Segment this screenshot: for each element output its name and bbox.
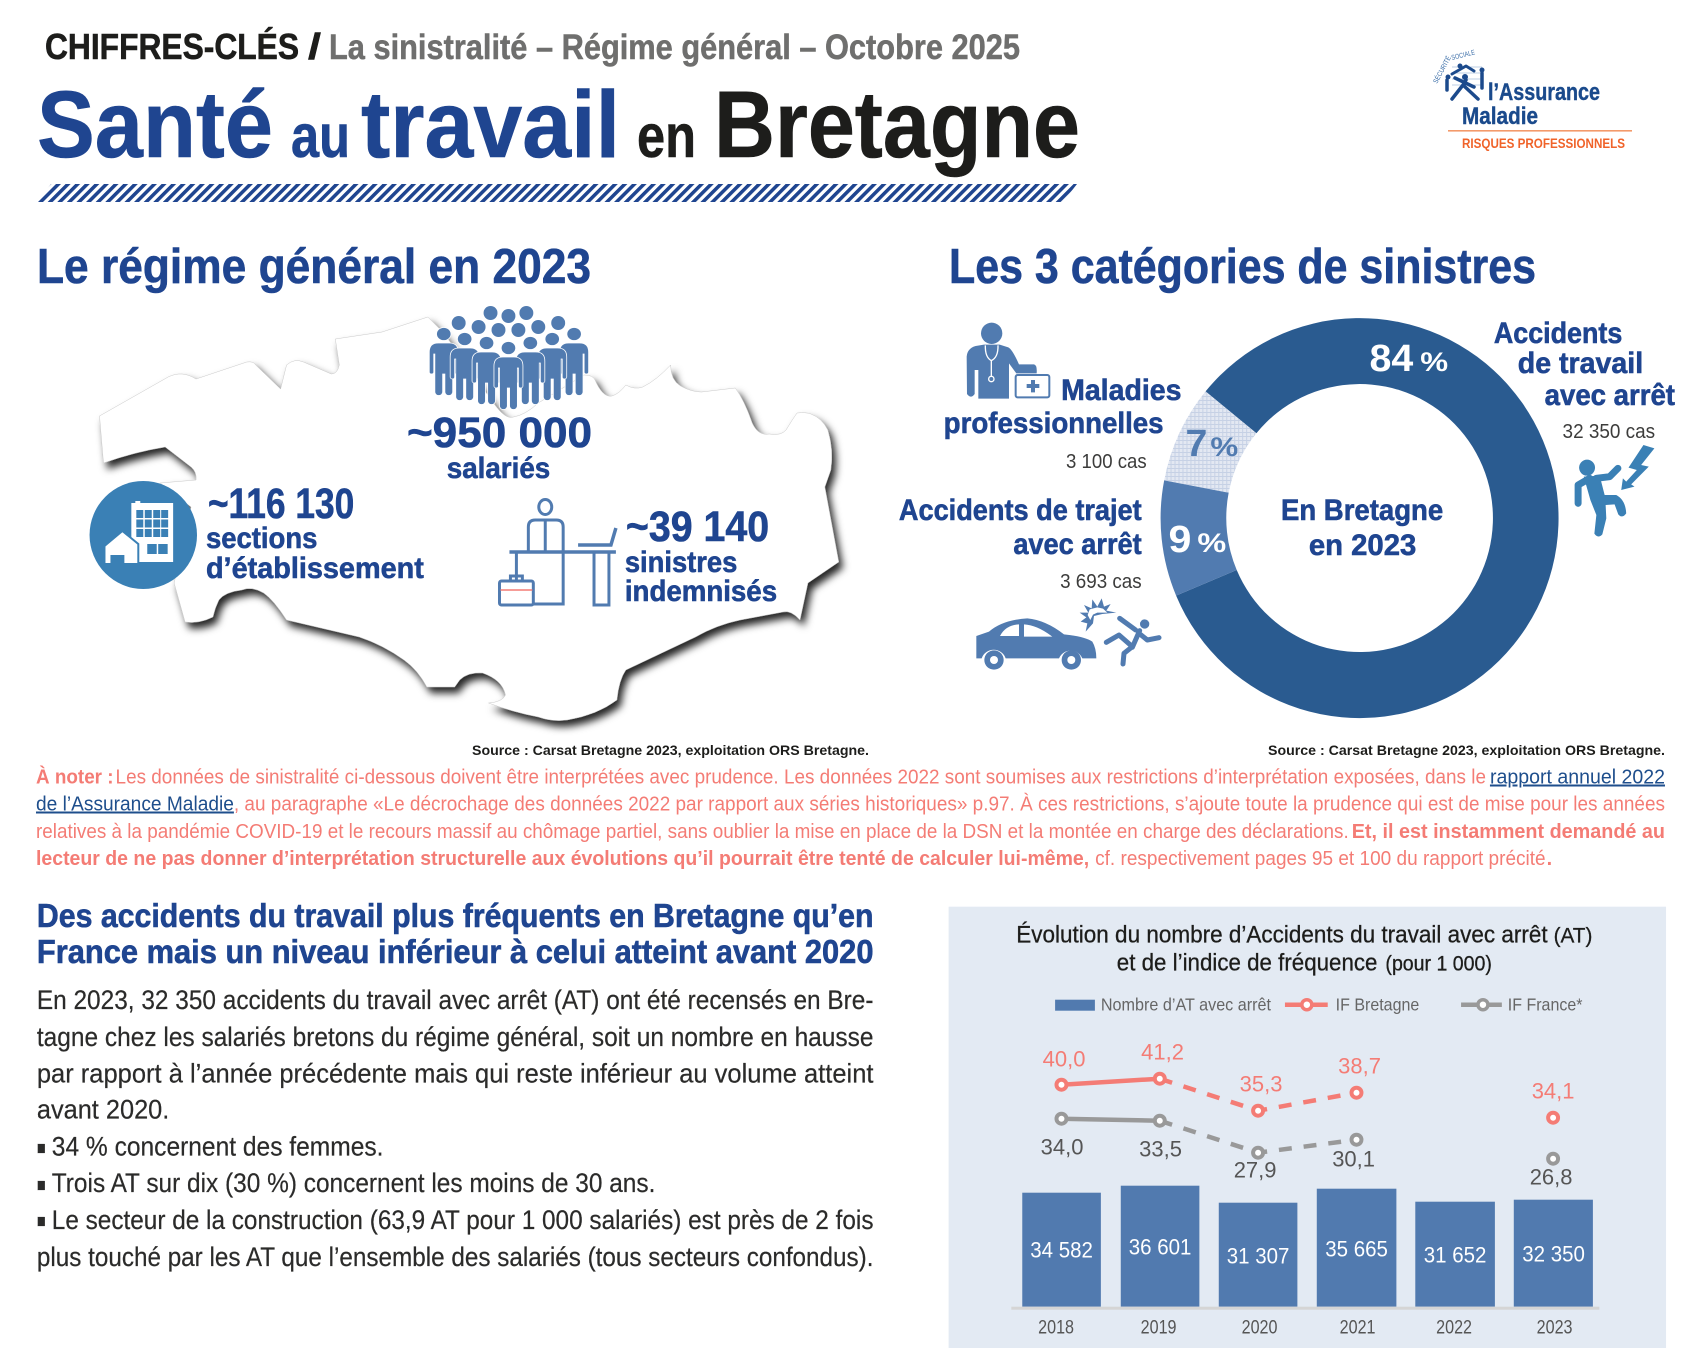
body text: Le secteur de la construction (63,9 AT pour 1 000 salariés) est près de 2 fois: [52, 1205, 873, 1235]
warning note: Et, il est instamment demandé au: [1352, 821, 1665, 843]
values: IF France: 27,9: [1234, 1158, 1276, 1183]
label: accidents de travail: de travail: [1518, 347, 1643, 380]
panel: evolution chart: [949, 907, 1666, 1348]
warning note: rapport annuel 2022: [1490, 766, 1665, 789]
values: IF France: [1041, 1135, 1572, 1190]
main title: [37, 72, 1080, 178]
legend: IF France*: [1508, 995, 1582, 1015]
bar values: 32 350: [1522, 1242, 1585, 1267]
heading: le régime général: Le régime général en 2023: [37, 240, 591, 294]
warning note: Les données de sinistralité ci-dessous doivent être interprétées avec prudence. Les données 2022 sont soumises aux restrictions d’interprétation exposées, dans le: [116, 766, 1486, 789]
segment: accidents du travail 84%: [1176, 318, 1559, 718]
icon: worker struck by lightning: [1578, 445, 1654, 537]
donut label 9 %: %: [1197, 528, 1226, 558]
stat: sections d'établissement: sections: [206, 522, 317, 555]
label: maladies professionnelles: Maladies: [1061, 374, 1181, 407]
chart title: [1016, 922, 1592, 977]
donut label 84 %: 84: [1370, 338, 1413, 380]
logo: l'Assurance Maladie: SÉCURITÉ: [1431, 54, 1453, 85]
donut centre label: En Bretagne: [1281, 494, 1443, 527]
bar values: 35 665: [1325, 1237, 1388, 1262]
label: accidents de trajet: [899, 494, 1142, 593]
values: IF France: 30,1: [1332, 1147, 1375, 1172]
bar values: 31 307: [1227, 1244, 1289, 1269]
donut label 7 %: %: [1210, 432, 1238, 462]
values: IF Bretagne: 35,3: [1240, 1072, 1282, 1097]
label: maladies professionnelles: 3 100 cas: [1066, 451, 1147, 473]
year labels: 2022: [1436, 1318, 1472, 1339]
stat: sinistres indemnisés: [625, 503, 777, 608]
label: accidents de travail: [1494, 317, 1675, 443]
stat: salariés: salariés: [447, 452, 550, 485]
bar values: 36 601: [1129, 1235, 1191, 1260]
chart title: Évolution du nombre d’Accidents du travail avec arrêt: [1016, 922, 1548, 949]
donut chart: 3 categories: [1161, 318, 1559, 718]
segment: maladies professionnelles 7%: [1164, 391, 1256, 493]
label: maladies professionnelles: [944, 374, 1181, 473]
heading: les 3 catégories: Les 3 catégories de sinistres: [949, 240, 1536, 294]
year labels: 2018: [1038, 1318, 1074, 1339]
main title: au: [291, 102, 350, 170]
main title: travail: [361, 72, 620, 178]
label: accidents de travail: avec arrêt: [1545, 379, 1675, 412]
stat: salariés: [407, 409, 592, 485]
values: IF Bretagne: 40,0: [1043, 1047, 1085, 1072]
donut label 9 %: [1169, 519, 1226, 561]
year labels: 2019: [1141, 1318, 1176, 1339]
stat: sinistres indemnisés: ~39 140: [626, 503, 769, 551]
header: kicker line: La sinistralité – Régime général – Octobre 2025: [329, 28, 1020, 67]
donut label 84 %: %: [1420, 347, 1448, 377]
line: IF Bretagne: [1056, 1074, 1558, 1123]
logo: l'Assurance Maladie: Maladie: [1462, 103, 1538, 130]
warning note: relatives à la pandémie COVID-19 et le recours massif au chômage partiel, sans oublier la mise en place de la DSN et la montée en charge des déclarations.: [36, 821, 1349, 843]
logo: l'Assurance Maladie: RISQUES PROFESSIONNELS: [1462, 135, 1625, 151]
chart title: (pour 1 000): [1385, 953, 1492, 976]
bar values: [1030, 1235, 1585, 1269]
stat: sinistres indemnisés: sinistres: [625, 546, 737, 579]
map of Brittany: [100, 317, 839, 721]
legend: IF Bretagne: [1336, 995, 1419, 1015]
chart title: (AT): [1554, 925, 1592, 948]
section heading: accidents plus fréquents: [37, 897, 873, 970]
warning note: .: [1547, 848, 1552, 870]
warning note: , au paragraphe «Le décrochage des données 2022 par rapport aux séries historiques» p.97. À ces restrictions, s’ajoute toute la prudence qui est de mise pour les années: [234, 792, 1665, 816]
donut label 7 %: 7: [1185, 423, 1207, 465]
stat: sections d'établissement: d’établissement: [206, 552, 424, 585]
main title: en: [637, 102, 696, 170]
icon: car hitting pedestrian: [976, 598, 1159, 670]
warning note: cf. respectivement pages 95 et 100 du rapport précité: [1095, 848, 1546, 870]
source note: left: Source : Carsat Bretagne 2023, exploitation ORS Bretagne.: [472, 742, 869, 758]
header: kicker line: [45, 26, 1020, 67]
bars: nombre d'AT: [1022, 1186, 1593, 1307]
header: kicker line: CHIFFRES-CLÉS: [45, 26, 299, 67]
main title: Bretagne: [714, 72, 1080, 178]
warning note: [36, 765, 1665, 870]
label: accidents de trajet: avec arrêt: [1013, 528, 1142, 561]
segment: accidents de trajet 9%: [1161, 480, 1237, 596]
stat: salariés: ~950 000: [407, 409, 592, 457]
icon: buildings in circle: [90, 481, 197, 589]
year labels: 2023: [1537, 1318, 1572, 1339]
year labels: [1038, 1318, 1572, 1339]
donut label 9 %: 9: [1169, 519, 1191, 561]
values: IF France: 33,5: [1139, 1137, 1182, 1162]
icon: doctor with medical case: [967, 323, 1049, 399]
hatched title underline: [37, 184, 1077, 202]
stat: sinistres indemnisés: indemnisés: [625, 575, 777, 608]
label: accidents de trajet: Accidents de trajet: [899, 494, 1142, 527]
chart title: et de l’indice de fréquence: [1117, 950, 1377, 977]
section heading: accidents plus fréquents: France mais un niveau inférieur à celui atteint avant 2020: [37, 933, 873, 970]
source note: right: Source : Carsat Bretagne 2023, exploitation ORS Bretagne.: [1268, 742, 1665, 758]
body text: tagne chez les salariés bretons du régime général, soit un nombre en hausse: [37, 1022, 873, 1052]
warning note: lecteur de ne pas donner d’interprétation structurelle aux évolutions qu’il pourrait être tenté de calculer lui-même,: [36, 848, 1089, 870]
values: IF Bretagne: 38,7: [1338, 1054, 1381, 1079]
warning note: À noter :: [36, 765, 114, 789]
main title: Santé: [37, 72, 273, 178]
body text: par rapport à l’année précédente mais qui reste inférieur au volume atteint: [37, 1058, 874, 1089]
values: IF Bretagne: [1043, 1040, 1574, 1104]
values: IF Bretagne: 34,1: [1532, 1079, 1574, 1104]
bar values: 31 652: [1424, 1243, 1486, 1268]
values: IF France: 26,8: [1530, 1165, 1572, 1190]
values: IF France: 34,0: [1041, 1135, 1083, 1160]
body text: 34 % concernent des femmes.: [52, 1131, 383, 1162]
logo: l'Assurance Maladie: SOCIALE: [1451, 49, 1476, 62]
legend: Nombre d’AT avec arrêt: [1101, 995, 1271, 1015]
year labels: 2021: [1340, 1318, 1375, 1339]
body text: Trois AT sur dix (30 %) concernent les moins de 30 ans.: [52, 1168, 655, 1198]
stat: sections d'établissement: ~116 130: [208, 480, 354, 528]
donut centre label: [1281, 494, 1443, 562]
line: IF France: [1056, 1114, 1558, 1164]
body text: En 2023, 32 350 accidents du travail avec arrêt (AT) ont été recensés en Bre-: [37, 985, 873, 1015]
stat: sections d'établissement: [206, 480, 424, 585]
values: IF Bretagne: 41,2: [1141, 1040, 1184, 1065]
bar values: 34 582: [1030, 1238, 1093, 1263]
section heading: accidents plus fréquents: Des accidents du travail plus fréquents en Bretagne qu’en: [37, 897, 873, 934]
legend: [1055, 995, 1582, 1015]
header: kicker line: /: [308, 26, 321, 67]
donut centre label: en 2023: [1309, 529, 1416, 562]
warning note: de l’Assurance Maladie: [36, 793, 234, 816]
label: accidents de trajet: 3 693 cas: [1060, 571, 1142, 593]
label: accidents de travail: 32 350 cas: [1563, 421, 1655, 443]
label: accidents de travail: Accidents: [1494, 317, 1622, 350]
body text: plus touché par les AT que l’ensemble des salariés (tous secteurs confondus).: [37, 1242, 873, 1272]
donut label 84 %: [1370, 338, 1448, 380]
label: maladies professionnelles: professionnelles: [944, 407, 1164, 440]
icon: crowd of employees: [429, 306, 589, 409]
logo: l'Assurance Maladie: l’Assurance: [1488, 79, 1600, 106]
year labels: 2020: [1242, 1318, 1277, 1339]
logo: l'Assurance Maladie: [1431, 49, 1632, 151]
icon: worker at desk with briefcase: [499, 500, 616, 605]
body text: [37, 985, 874, 1272]
donut label 7 %: [1185, 423, 1238, 465]
body text: avant 2020.: [37, 1094, 169, 1125]
axis: [1011, 1307, 1599, 1310]
